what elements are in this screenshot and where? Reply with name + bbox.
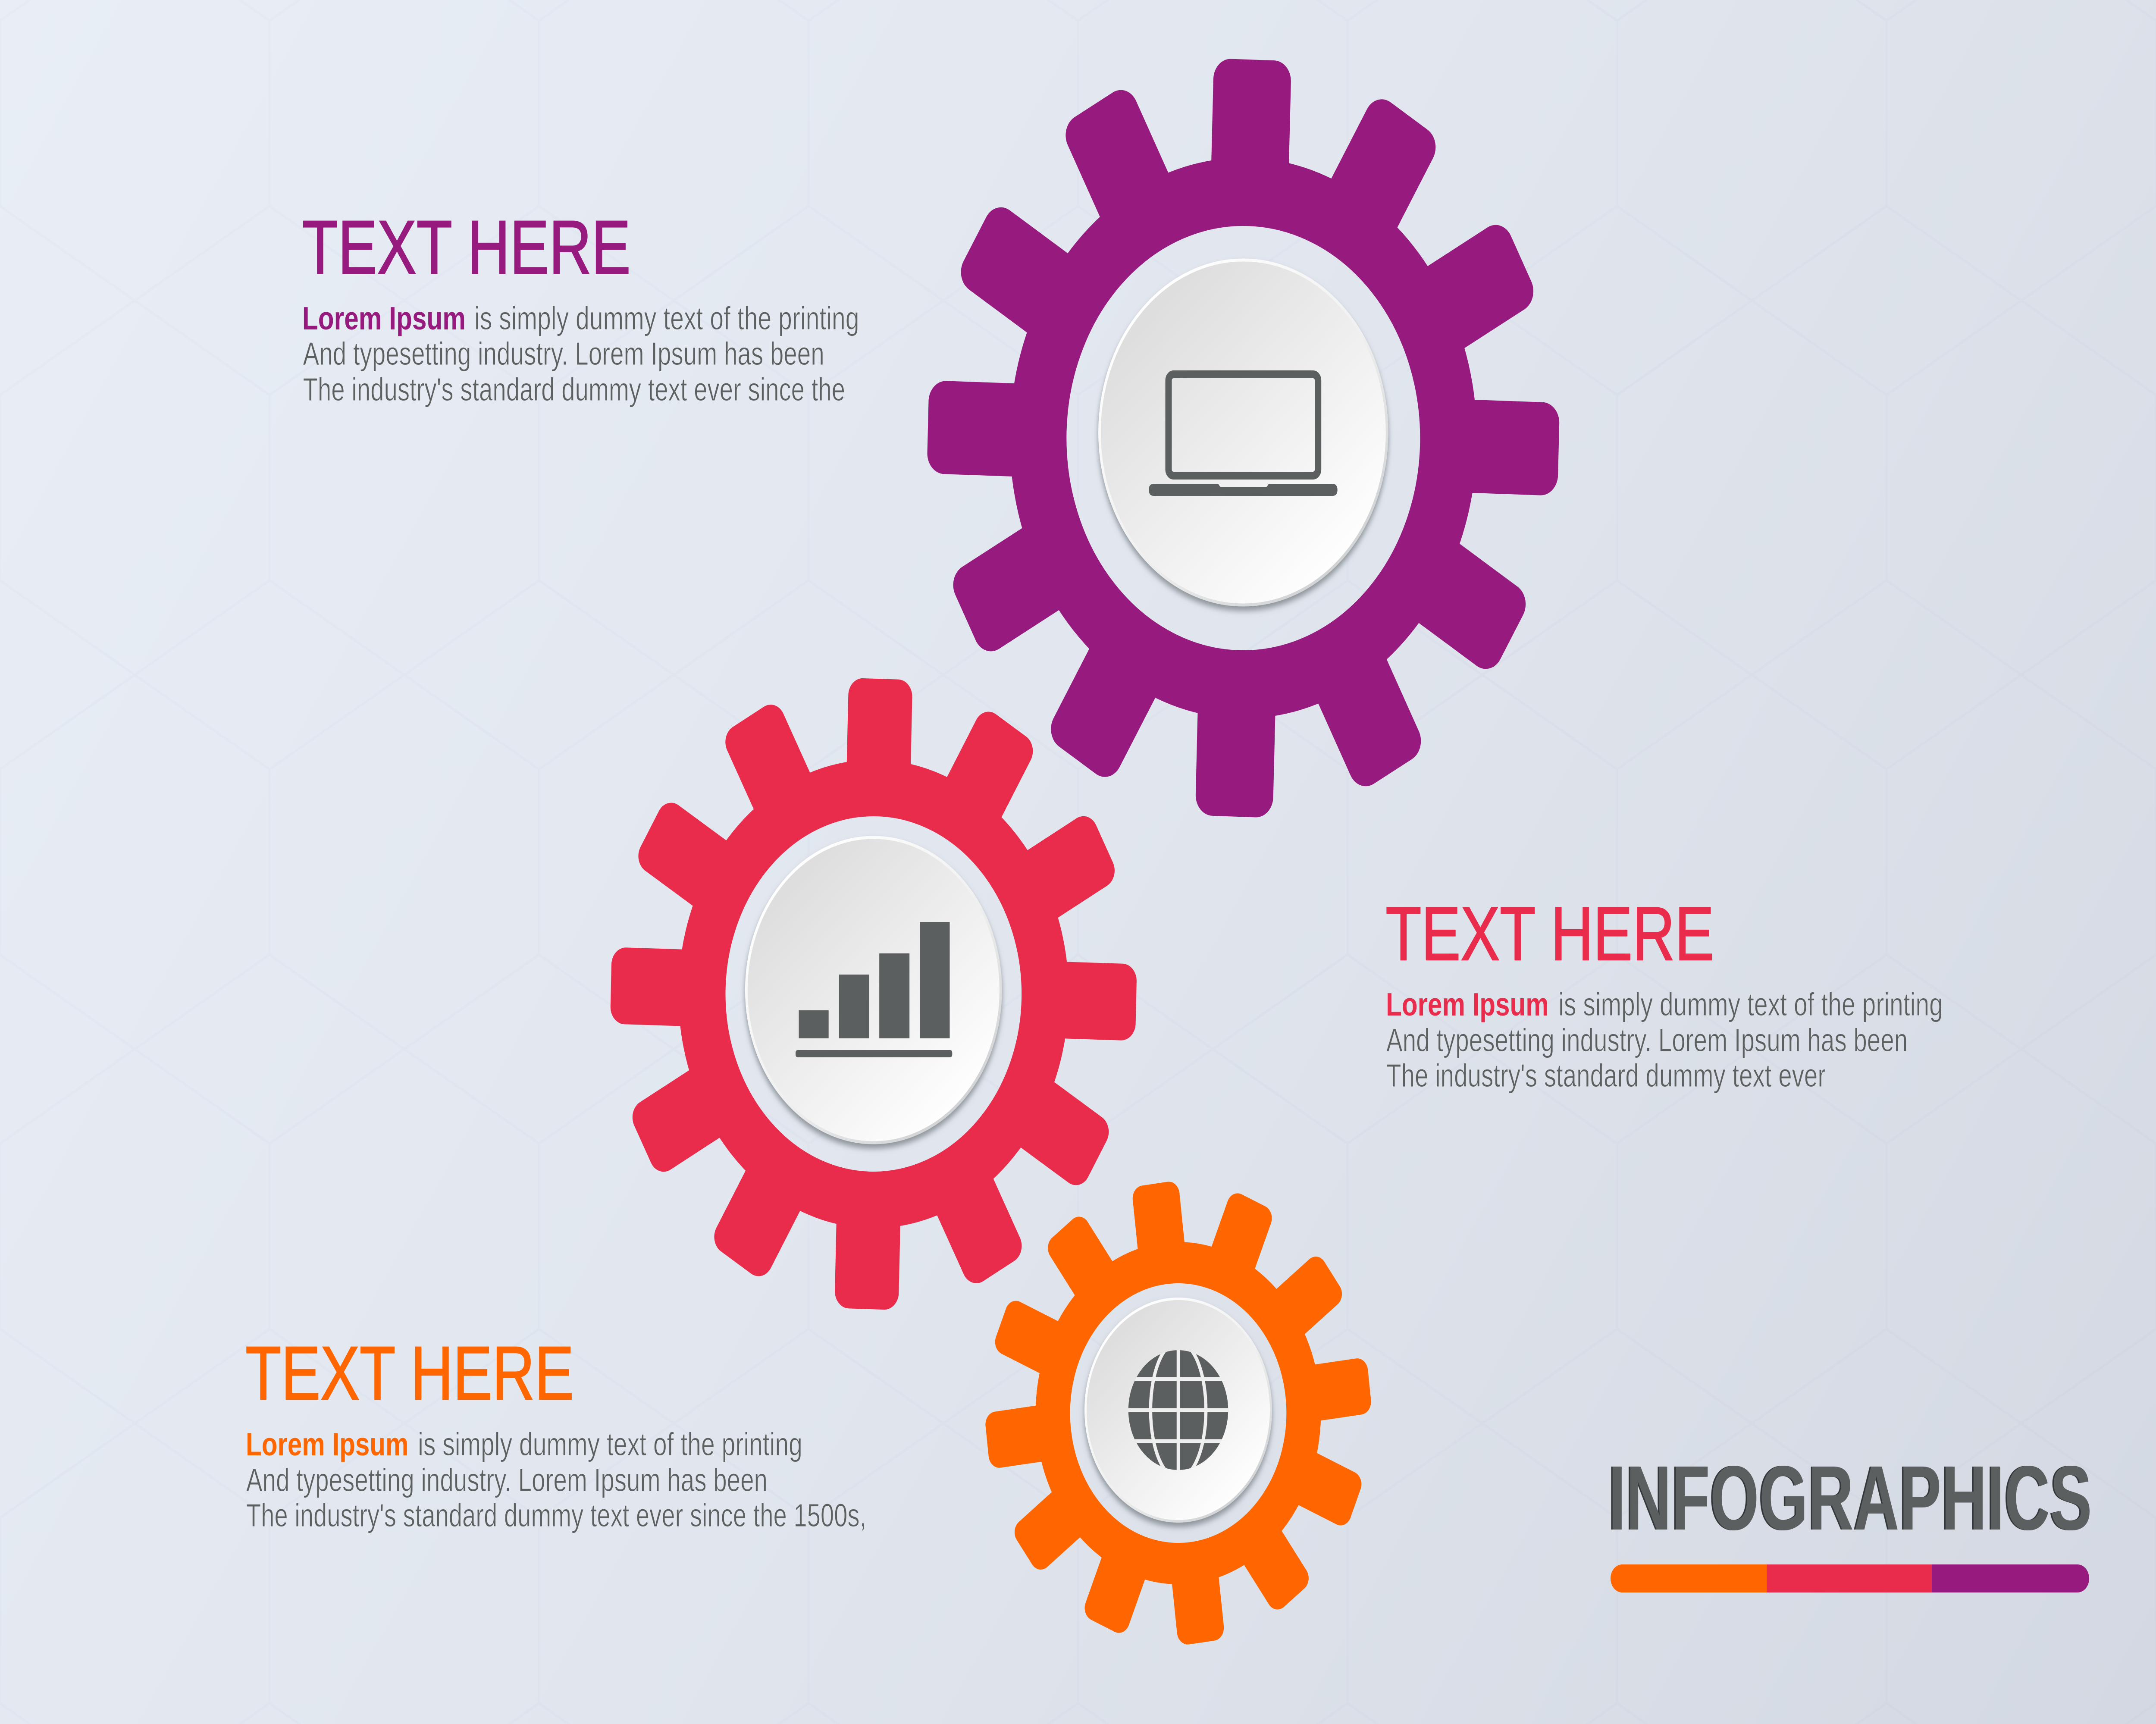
icon: laptop [1149, 374, 1338, 496]
body: red: The industry's standard dummy text ever [1386, 1058, 1826, 1094]
disc: red gear [746, 837, 1001, 1143]
gear: red [604, 670, 1143, 1318]
heading: red: TEXT HERE [1385, 891, 1714, 976]
heading: purple: TEXT HERE [302, 205, 631, 290]
disc: orange gear [1086, 1299, 1271, 1521]
heading: orange: TEXT HERE [245, 1331, 574, 1416]
body: orange: And typesetting industry. Lorem Ipsum has been [246, 1462, 768, 1498]
body: orange [246, 1426, 866, 1533]
icon: bar chart [796, 922, 952, 1057]
body: purple: The industry's standard dummy text ever since the [303, 372, 845, 407]
body: red: And typesetting industry. Lorem Ipsum has been [1386, 1022, 1908, 1058]
icon: globe [1128, 1350, 1228, 1470]
body: orange: is simply dummy text of the printing [418, 1426, 802, 1462]
body: purple: Lorem Ipsum [302, 301, 466, 336]
body: orange: The industry's standard dummy text ever since the 1500s, [246, 1498, 866, 1533]
text block: orange [245, 1331, 866, 1533]
colour bar [1611, 1564, 2089, 1592]
body: purple [302, 301, 859, 407]
text block: purple [302, 205, 859, 407]
body: purple: is simply dummy text of the printing [474, 301, 859, 336]
body: red [1386, 987, 1943, 1094]
text block: red [1385, 891, 1943, 1094]
body: red: is simply dummy text of the printing [1558, 987, 1943, 1022]
body: red: Lorem Ipsum [1386, 987, 1549, 1022]
disc: purple gear [1100, 260, 1387, 605]
gear: orange [964, 1156, 1393, 1671]
body: purple: And typesetting industry. Lorem Ipsum has been [303, 336, 824, 372]
body: orange: Lorem Ipsum [246, 1426, 409, 1462]
gear: purple [918, 48, 1568, 828]
